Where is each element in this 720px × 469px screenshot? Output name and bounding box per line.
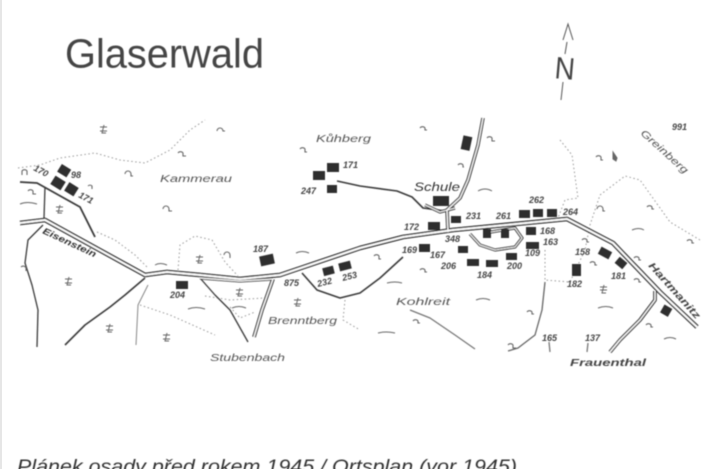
- map: house numbers: 875: [284, 278, 300, 288]
- map: house numbers: 165: [542, 333, 558, 343]
- map: place names: Kůhberg: [316, 133, 372, 145]
- map: house numbers: 232: [315, 276, 333, 289]
- title: Glaserwald: [65, 30, 264, 76]
- map: house numbers: 168: [540, 226, 555, 236]
- map: house numbers: 163: [543, 237, 558, 247]
- map: hill symbols: [21, 127, 694, 348]
- map: house numbers: 172: [404, 222, 419, 232]
- map: house numbers: 200: [506, 261, 522, 271]
- map: house numbers: 170: [32, 163, 50, 179]
- map: place names: Kohlreit: [396, 297, 452, 308]
- map: house numbers: 991: [672, 122, 687, 132]
- map: house numbers: 158: [575, 247, 590, 257]
- map: house numbers: 184: [477, 270, 492, 280]
- map: house numbers: 181: [611, 271, 626, 281]
- map: house numbers: 182: [567, 279, 582, 289]
- map: house numbers: 187: [253, 244, 269, 254]
- map: roads: [20, 118, 697, 352]
- icon: north arrow: N: [553, 50, 576, 87]
- map: house numbers: 247: [300, 186, 317, 196]
- map: place names: Kammerau: [160, 174, 233, 185]
- map: streams and paths: [20, 181, 588, 352]
- map: house numbers: 348: [445, 234, 460, 244]
- map: place names: Schule: [414, 180, 460, 194]
- map: house numbers: 261: [495, 211, 511, 221]
- map: place names: Frauenthal: [570, 358, 646, 369]
- map: house numbers: 137: [585, 333, 601, 343]
- map: place names: Eisenstein: [41, 226, 99, 260]
- map: house numbers: 204: [169, 290, 185, 300]
- map: house numbers: 169: [402, 245, 417, 255]
- map: place names: Hartmanitz: [646, 261, 702, 322]
- icon: north arrow: [553, 24, 576, 100]
- map: place names: Brenntberg: [268, 316, 338, 327]
- map: house numbers: 264: [562, 207, 578, 217]
- map: dotted boundaries: [18, 120, 700, 335]
- map: house numbers: 171: [343, 160, 358, 170]
- map: place names: Stubenbach: [210, 353, 286, 364]
- map: house numbers: 262: [528, 195, 544, 205]
- map: house numbers: 206: [440, 261, 457, 271]
- map: tree and meadow symbols: [20, 125, 676, 341]
- map: house numbers: [32, 122, 687, 343]
- map: place names: [41, 128, 702, 369]
- map: house blocks: [50, 135, 672, 317]
- map: house numbers: 109: [525, 248, 540, 258]
- map: house numbers: 253: [340, 270, 358, 283]
- map: house numbers: 167: [430, 250, 446, 260]
- map: place names: Greinberg: [638, 128, 690, 177]
- map: house numbers: 171: [77, 190, 95, 206]
- map: house numbers: 98: [71, 170, 81, 180]
- map: house numbers: 231: [465, 211, 481, 221]
